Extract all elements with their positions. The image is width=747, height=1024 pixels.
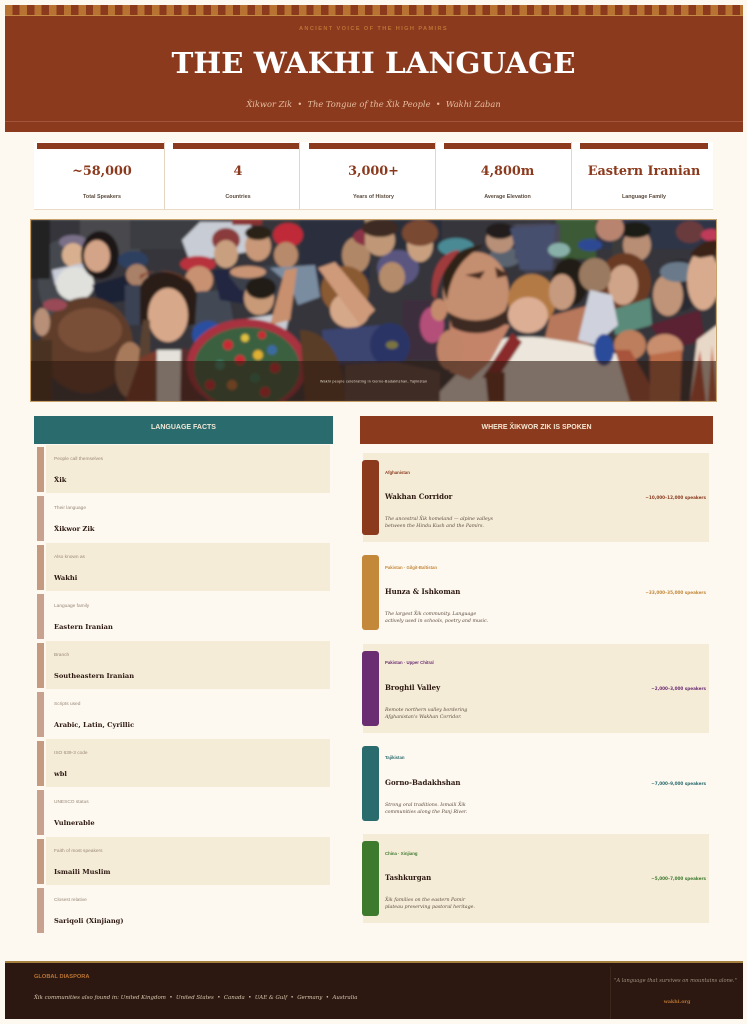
stat: average elevation: Average Elevation	[484, 194, 531, 200]
stat: countries: Countries	[225, 194, 251, 200]
caption band	[30, 361, 717, 402]
stat: total speakers: ~58,000	[72, 164, 132, 179]
region: Gorno-Badakhshan: Tajikistan	[385, 755, 405, 760]
stat: language family: Eastern Iranian	[588, 164, 700, 179]
region: Hunza and Ishkoman	[362, 555, 706, 630]
region: Wakhan Corridor: ~10,000–12,000 speakers	[645, 495, 706, 500]
stat: years of history	[300, 142, 436, 210]
stat: countries	[165, 142, 300, 210]
footer quote block	[610, 967, 742, 1019]
region: Hunza and Ishkoman: Pakistan · Gilgit-Baltistan	[385, 565, 437, 570]
hands	[614, 330, 646, 360]
website: wakhi.org	[664, 999, 690, 1005]
right crowd	[510, 225, 555, 270]
fact: branch	[37, 641, 330, 689]
central woman	[140, 272, 197, 325]
fact: scripts used: Arabic, Latin, Cyrillic	[54, 721, 134, 729]
region: Hunza and Ishkoman: ~33,000–35,000 speakers	[645, 590, 706, 595]
panel heading: where spoken: WHERE X̌IKWOR ZIK IS SPOKEN	[481, 424, 592, 431]
stat: years of history: Years of History	[353, 194, 394, 200]
panel heading: language facts	[34, 416, 333, 444]
region: Broghil Valley: Afghanistan's Wakhan Corridor.	[385, 715, 461, 720]
footer	[4, 961, 742, 1019]
region: Wakhan Corridor: Wakhan Corridor	[385, 492, 452, 501]
region: Wakhan Corridor: The ancestral X̌ik homeland — alpine valleys	[385, 517, 493, 522]
region: Tashkurgan: ~5,000–7,000 speakers	[651, 876, 706, 881]
stat: language family	[572, 142, 713, 210]
upper right of left half	[342, 237, 370, 273]
fact: branch: Branch	[54, 653, 69, 658]
region: Gorno-Badakhshan: Gorno-Badakhshan	[385, 778, 460, 787]
child with white hat, ball	[59, 235, 87, 249]
region: Wakhan Corridor	[362, 453, 709, 542]
hair behind cap	[300, 330, 345, 402]
raised arm	[270, 268, 297, 325]
woman holding child	[599, 253, 651, 311]
stat: language family: Language Family	[622, 194, 666, 200]
title: THE WAKHI LANGUAGE	[172, 45, 575, 80]
woman behind with headscarf	[212, 228, 240, 252]
fact: also known as: Wakhi	[54, 574, 77, 582]
stat: average elevation: 4,800m	[481, 164, 534, 179]
region: Wakhan Corridor: Afghanistan	[385, 470, 410, 474]
fact: people call themselves	[37, 445, 330, 493]
small fill beside cap	[345, 362, 440, 402]
footer heading: GLOBAL DIASPORA	[34, 974, 90, 980]
region: Broghil Valley: Pakistan · Upper Chitral	[385, 660, 434, 665]
stat: total speakers: Total Speakers	[83, 194, 121, 200]
fact: people call themselves: People call themselves	[54, 457, 103, 462]
fact: faith: Faith of most speakers	[54, 849, 103, 854]
stat: countries: 4	[234, 164, 242, 179]
region: Broghil Valley	[362, 644, 709, 733]
fact: unesco status: UNESCO status	[54, 800, 89, 805]
region: Gorno-Badakhshan: Strong oral traditions. Ismaili X̌ik	[385, 803, 466, 808]
fact: language family: Language family	[54, 604, 89, 609]
region: Hunza and Ishkoman: actively used in schools, poetry and music.	[385, 619, 488, 624]
fact: their language: Their language	[54, 506, 86, 511]
fact: unesco status	[37, 790, 95, 835]
red-haired woman	[508, 274, 556, 326]
fact: iso code	[37, 739, 330, 787]
region: Gorno-Badakhshan: ~7,000–9,000 speakers	[651, 781, 706, 786]
region: Tashkurgan: China · Xinjiang	[385, 851, 417, 856]
fact: language family: Eastern Iranian	[54, 623, 113, 631]
fact: faith: Ismaili Muslim	[54, 868, 110, 876]
left hair woman foreground	[41, 297, 133, 393]
fact: iso code: ISO 639-3 code	[54, 751, 88, 756]
man neck and face	[450, 320, 510, 380]
child center	[244, 281, 274, 315]
region: Hunza and Ishkoman: Hunza & Ishkoman	[385, 587, 460, 596]
fact: iso code: wbl	[54, 770, 67, 778]
fact: language family	[37, 594, 113, 639]
blue yellow garment	[190, 320, 219, 344]
woman with dark hair	[81, 231, 119, 279]
fact: people call themselves: X̌ik	[54, 476, 66, 484]
background crowd	[80, 219, 140, 259]
stat: average elevation	[436, 142, 572, 210]
fact: also known as	[37, 543, 330, 591]
embroidered cap	[187, 319, 307, 411]
region: Broghil Valley: Broghil Valley	[385, 683, 440, 692]
stat: total speakers	[34, 142, 165, 210]
diaspora list: X̌ik communities also found in: United Kingdom • United States • Canada • UAE & Gulf • Germany • Australia	[34, 994, 357, 1000]
fact: also known as: Also known as	[54, 555, 85, 560]
region: Tashkurgan	[362, 834, 709, 923]
region: Broghil Valley: ~2,000–3,000 speakers	[651, 686, 706, 691]
region: Wakhan Corridor: between the Hindu Kush and the Pamirs.	[385, 524, 484, 529]
fact: faith	[37, 837, 330, 885]
panel heading: where spoken	[360, 416, 713, 444]
woven stripe band	[4, 4, 742, 16]
red cap man	[273, 223, 303, 247]
region: Hunza and Ishkoman: The largest X̌ik community. Language	[385, 612, 476, 617]
subtitle: X̌ikwor Zik • The Tongue of the X̌ik People • Wakhi Zaban	[246, 98, 501, 108]
fact: closest relative	[37, 888, 124, 933]
region: Gorno-Badakhshan: communities along the Panj River.	[385, 810, 467, 815]
hand near neck	[435, 328, 452, 372]
fact: unesco status: Vulnerable	[54, 819, 95, 827]
fact: their language	[37, 496, 95, 541]
fact: closest relative: Closest relative	[54, 898, 87, 903]
region: Broghil Valley: Remote northern valley bordering	[385, 708, 467, 713]
quote: "A language that survives on mountains alone."	[614, 978, 737, 984]
caption band: Wakhi people celebrating in Gorno-Badakhshan, Tajikistan	[320, 380, 427, 384]
scarf woman	[680, 260, 692, 310]
region: Tashkurgan: Tashkurgan	[385, 873, 431, 882]
fact: scripts used: Scripts used	[54, 702, 80, 707]
fact: scripts used	[37, 692, 134, 737]
blue/white patterned shirt and scarves	[377, 250, 419, 286]
fact: closest relative: Sariqoli (Xinjiang)	[54, 917, 124, 925]
header banner	[4, 4, 742, 132]
eyebrow text: ANCIENT VOICE OF THE HIGH PAMIRS	[299, 26, 448, 32]
right-edge smiling woman	[690, 325, 717, 402]
panel heading: language facts: LANGUAGE FACTS	[151, 424, 216, 431]
young man	[245, 231, 271, 261]
fact: their language: X̌ikwor Zik	[54, 525, 94, 533]
red cap boy	[180, 256, 216, 272]
region: Tashkurgan: X̌ik families on the eastern Pamir	[385, 898, 465, 903]
man shirt	[430, 337, 640, 402]
dancing woman	[321, 266, 369, 314]
girl in dark hair	[552, 258, 588, 306]
region: Tashkurgan: plateau preserving pastoral heritage.	[385, 905, 475, 910]
photo: crowd of Wakhi people celebrating	[30, 219, 717, 402]
stat: years of history: 3,000+	[348, 164, 399, 179]
region: Gorno-Badakhshan	[362, 746, 706, 821]
fact: branch: Southeastern Iranian	[54, 672, 134, 680]
boy in navy cap	[118, 251, 148, 269]
